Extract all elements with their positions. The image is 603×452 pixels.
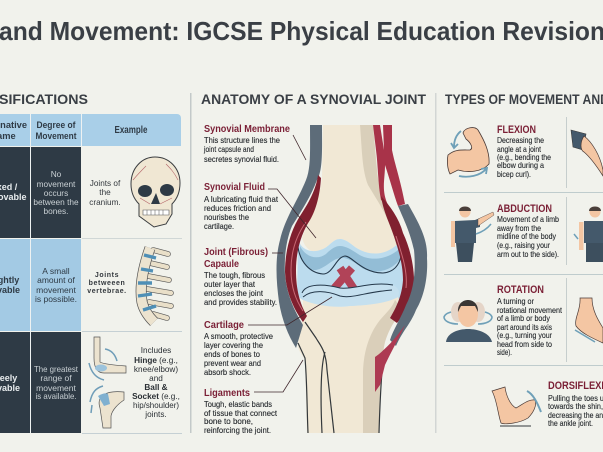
card: rotation: of a limb or body xyxy=(497,313,551,323)
row: slightly movable: betweeen xyxy=(89,280,125,287)
panel: classifications table xyxy=(0,114,182,434)
table header: Degree of xyxy=(36,120,76,130)
row: fixed: Joints of xyxy=(90,179,121,188)
row: freely movable: Ball & xyxy=(144,383,168,392)
label: cartilage: layer covering the xyxy=(204,340,263,350)
label: joint capsule: encloses the joint xyxy=(204,288,264,298)
card: flexion: (e.g., bending the xyxy=(497,152,551,162)
label: joint capsule: Joint (Fibrous) xyxy=(204,246,268,258)
icon: person abduction xyxy=(451,206,494,262)
label: ligaments xyxy=(204,387,278,435)
right capsule xyxy=(390,204,427,346)
bone outlines xyxy=(305,322,334,433)
leader lines xyxy=(248,135,332,392)
cruciate ligaments xyxy=(331,268,356,292)
card: rotation: head from side to xyxy=(497,339,552,349)
row: fixed: movement xyxy=(37,179,76,189)
row: fixed xyxy=(0,147,121,238)
table header: Example xyxy=(114,125,148,136)
label: joint capsule: The tough, fibrous xyxy=(204,270,265,280)
card: dorsiflexion xyxy=(548,380,603,428)
chart: knee joint diagram xyxy=(248,125,427,433)
card: dorsiflexion: the ankle joint. xyxy=(548,418,593,428)
icon: head rotation xyxy=(444,300,492,342)
card: flexion: Decreasing the xyxy=(497,135,544,145)
icon: foot dorsiflexion xyxy=(492,387,541,426)
label: cartilage: ends of bones to xyxy=(204,349,260,359)
card: rotation: rotational movement xyxy=(497,305,563,315)
label: cartilage xyxy=(204,319,273,377)
icon: flexed arm xyxy=(447,128,489,177)
card: rotation xyxy=(497,284,563,357)
label: joint capsule: Capaule xyxy=(204,258,239,270)
row: freely movable: is available. xyxy=(36,391,76,401)
synovial outline upper xyxy=(298,246,402,274)
heading: classifications: SIFICATIONS xyxy=(0,91,88,107)
icon: spine xyxy=(138,248,171,322)
icon: hinge joint xyxy=(89,337,126,380)
panel: anatomy labels xyxy=(203,123,290,435)
row: freely movable: movement xyxy=(36,383,76,393)
label: synovial membrane xyxy=(203,123,290,164)
row: slightly movable: amount of xyxy=(37,275,76,285)
label: ligaments: reinforcing the joint. xyxy=(204,425,271,435)
label: ligaments: of tissue that connect xyxy=(204,408,278,418)
label: ligaments: Ligaments xyxy=(204,387,250,399)
tibia bone xyxy=(298,297,400,433)
left capsule xyxy=(276,125,322,348)
panel: types of movement xyxy=(444,117,603,428)
label: cartilage: absorb shock. xyxy=(204,367,251,377)
left red band xyxy=(285,175,321,322)
card: rotation: side). xyxy=(497,347,512,357)
icon: skull xyxy=(131,157,180,227)
label: synovial membrane: joint capsule and xyxy=(203,144,254,154)
card: flexion: elbow during a xyxy=(497,160,544,170)
card: abduction: ABDUCTION xyxy=(497,203,552,215)
label: ligaments: Tough, elastic bands xyxy=(204,399,272,409)
label: cartilage: prevent wear and xyxy=(204,358,261,368)
label: synovial fluid: Synovial Fluid xyxy=(204,181,265,193)
row: freely movable: Includes xyxy=(141,346,171,355)
row: fixed: the xyxy=(99,188,111,197)
card: flexion: FLEXION xyxy=(497,124,536,136)
row: freely movable: knee/elbow) xyxy=(134,365,178,374)
row: fixed: occurs xyxy=(44,188,68,198)
right muscle strands xyxy=(373,125,405,206)
label: synovial fluid xyxy=(204,181,279,231)
icon: person adduction xyxy=(574,206,603,262)
row: slightly movable: Joints xyxy=(95,272,119,279)
row: slightly movable: movement xyxy=(36,285,76,295)
row: slightly movable: is possible. xyxy=(35,294,77,304)
label: synovial fluid: nourisbes the xyxy=(204,212,249,222)
row: freely movable: range of xyxy=(40,373,72,383)
card: flexion: bicep curl). xyxy=(497,169,531,179)
label: synovial membrane: Synovial Membrane xyxy=(204,123,290,135)
row: freely movable: Socket (e.g., xyxy=(132,392,180,401)
icon: foot plantarflexion xyxy=(575,298,603,343)
label: cartilage: A smooth, protective xyxy=(204,331,273,341)
row: freely movable: hip/shoulder) xyxy=(133,401,179,410)
row: fixed: between the xyxy=(33,197,79,207)
right ligament fan xyxy=(375,325,405,392)
row: freely movable: joints. xyxy=(144,410,167,419)
icon: extended arm xyxy=(571,130,603,176)
label: synovial membrane: This structure lines the xyxy=(204,135,280,145)
label: synovial fluid: reduces friction and xyxy=(204,203,271,213)
label: cartilage: Cartilage xyxy=(204,319,244,331)
femur bone xyxy=(302,125,399,255)
row: freely movable: Hinge (e.g., xyxy=(134,356,178,365)
icon: ball and socket joint xyxy=(90,386,124,428)
table header: Movement xyxy=(36,131,76,141)
joint cavity fluid xyxy=(297,238,406,306)
label: ligaments: bone to bone, xyxy=(204,416,253,426)
row: freely movable xyxy=(0,332,180,433)
card: rotation: ROTATION xyxy=(497,284,544,296)
label: joint capsule: and provides stability. xyxy=(204,297,277,307)
row: slightly movable: vertebrae. xyxy=(87,288,127,295)
label: synovial fluid: cartilage. xyxy=(204,221,234,231)
card: abduction: away from the xyxy=(497,223,541,233)
card: abduction: midline of the body xyxy=(497,231,557,241)
card: rotation: (e.g., turning your xyxy=(497,330,552,340)
row: slightly movable xyxy=(0,239,127,331)
row: freely movable: and xyxy=(149,374,163,383)
label: joint capsule xyxy=(204,246,277,307)
label: synovial membrane: secretes synovial fluid. xyxy=(204,154,279,164)
label: joint capsule: outer layer that xyxy=(204,279,256,289)
tibial cartilage xyxy=(302,284,399,307)
label: synovial fluid: A lubricating fluid that xyxy=(204,194,279,204)
card: abduction: arm out to the side). xyxy=(497,249,559,259)
right red band xyxy=(381,196,414,323)
row: freely movable: The greatest xyxy=(34,364,79,374)
card: abduction: (e.g., raising your xyxy=(497,240,550,250)
card: flexion xyxy=(497,124,551,179)
heading: anatomy of a synovial joint: ANATOMY OF A SYNOVIAL JOINT xyxy=(201,91,426,107)
row: fixed: cranium. xyxy=(89,198,121,207)
table header xyxy=(0,114,181,146)
row: fixed: bones. xyxy=(44,206,68,216)
card: abduction xyxy=(497,203,559,259)
card: flexion: angle at a joint xyxy=(497,144,542,154)
card: abduction: Movement of a limb xyxy=(497,214,559,224)
row: slightly movable: A small xyxy=(42,266,70,276)
row: fixed: No xyxy=(51,169,62,179)
card: rotation: A turning or xyxy=(497,296,534,306)
card: rotation: part around its axis xyxy=(497,322,552,332)
